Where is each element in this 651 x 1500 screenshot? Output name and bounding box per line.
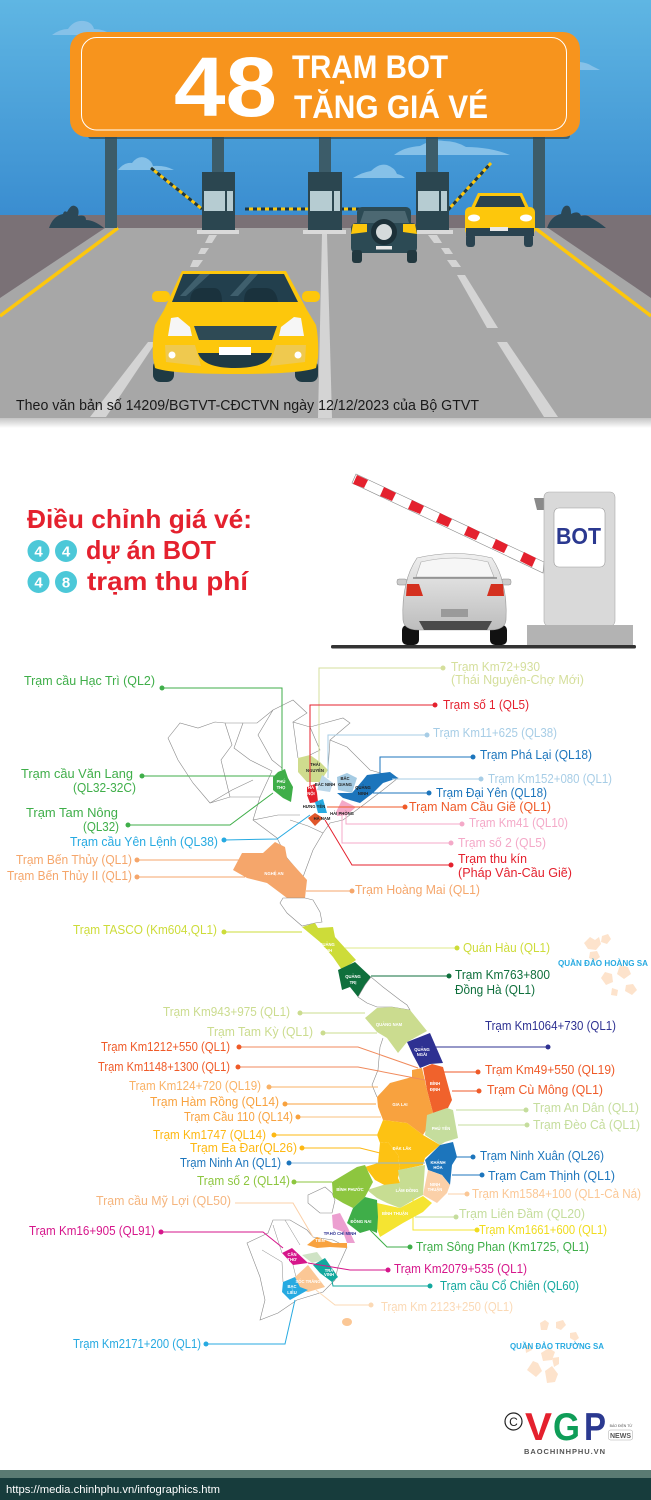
island group: Hoang Sa [558, 934, 648, 996]
province name labels: QUẢNG [319, 942, 335, 947]
yellow edge lines [0, 228, 651, 316]
province name labels: HÀ NAM [314, 816, 331, 821]
station label: Ea Dar: Trạm Ea Đar(QL26) [190, 1141, 297, 1155]
province name labels: NINH [358, 791, 368, 796]
province name labels: ĐỒNG NAI [351, 1219, 371, 1224]
province name labels: HƯNG YÊN [303, 804, 325, 809]
island group: Truong Sa: QUẦN ĐẢO TRƯỜNG SA [510, 1341, 604, 1351]
station label: Deo Ca [458, 1118, 640, 1132]
province name labels: NGUYÊN [306, 768, 324, 773]
number badges: 4 [34, 544, 43, 560]
province name labels: BÌNH PHƯỚC [336, 1187, 364, 1192]
interior borders north [210, 710, 330, 833]
station label: TASCO [73, 923, 302, 937]
island group: Hoang Sa: QUẦN ĐẢO HOÀNG SA [558, 958, 648, 968]
Quang Nam [365, 1007, 427, 1053]
logo: VGP News: G [553, 1406, 580, 1449]
station label: Ea Dar [190, 1141, 380, 1155]
island group: Truong Sa [510, 1320, 604, 1383]
station label: Song Phan: Trạm Sông Phan (Km1725, QL1) [416, 1240, 589, 1254]
number badges [28, 540, 77, 593]
Dong Nai [347, 1197, 378, 1233]
province name labels: TIỀN [315, 1238, 325, 1243]
station label: Km1212+550 [101, 1040, 418, 1068]
Khanh Hoa [425, 1142, 457, 1185]
station label: Ben Thuy II: Trạm Bến Thủy II (QL1) [7, 869, 132, 883]
station label: Km124+720 [129, 1079, 378, 1093]
station label: Ninh An [180, 1156, 425, 1170]
station label: Km11+625: Trạm Km11+625 (QL38) [433, 726, 557, 740]
station label: Cau Van Lang: Trạm cầu Văn Lang [21, 767, 133, 781]
station label: Ninh Xuan: Trạm Ninh Xuân (QL26) [480, 1149, 604, 1163]
station label: Cau Hoc Tri: Trạm cầu Hạc Trì (QL2) [24, 674, 155, 688]
province name labels: BẮC NINH [315, 782, 335, 787]
province name labels: TP.HỒ CHÍ MINH [324, 1231, 356, 1236]
Thai Nguyen [298, 755, 328, 782]
number badges: 4 [62, 544, 71, 560]
Phu Tho [273, 769, 293, 802]
station label: Quan Hau [345, 941, 550, 955]
station label: Km763+800: Trạm Km763+800 [455, 968, 550, 982]
ground line [331, 645, 636, 648]
Ho Chi Minh City [332, 1213, 355, 1243]
province name labels: BÌNH [430, 1081, 440, 1086]
booth: BOT [556, 523, 601, 549]
gantry pillars [105, 137, 545, 228]
station label: Nam Cau Gie: Trạm Nam Cầu Giẽ (QL1) [409, 800, 551, 814]
station label: Ben Thuy: Trạm Bến Thủy (QL1) [16, 853, 132, 867]
station label: An Dan [456, 1101, 639, 1115]
logo: VGP News: BAOCHINHPHU.VN [524, 1447, 605, 1456]
province name labels: LIÊU [287, 1290, 297, 1295]
province name labels: BÌNH THUẬN [382, 1211, 408, 1216]
province name labels: HẢI PHÒNG [330, 811, 354, 816]
station label: Cau 110 [184, 1110, 381, 1124]
heading: adjusted ticket prices: Điều chỉnh giá vé: [27, 504, 252, 534]
station label: Km1064+730 [436, 1019, 616, 1050]
Quang Ninh [337, 772, 398, 803]
province name labels: NGÃI [417, 1052, 427, 1057]
province name labels: QUẢNG NAM [376, 1022, 403, 1027]
station label: So 2 QL5: Trạm số 2 (QL5) [458, 836, 546, 850]
Binh Thuan [373, 1196, 432, 1237]
booth [527, 492, 633, 645]
footer bar: https://media.chinhphu.vn/infographics.htm [6, 1484, 220, 1496]
station label: Pha Lai [380, 748, 592, 775]
title sign [70, 32, 580, 137]
heading: adjusted ticket prices: dự án BOT [86, 535, 216, 565]
Mekong delta outline [247, 1220, 347, 1320]
province name labels: THỌ [277, 785, 286, 790]
station label: Km11+625 [328, 726, 557, 778]
logo: VGP News: NEWS [610, 1433, 631, 1440]
station label: Hoang Mai: Trạm Hoàng Mai (QL1) [355, 883, 480, 897]
station label: Km1148+1300: Trạm Km1148+1300 (QL1) [98, 1060, 230, 1074]
station label: Km152+080 [392, 772, 612, 786]
Vinh Long [302, 1252, 323, 1263]
Bac Giang [337, 773, 357, 793]
barrier arm [352, 474, 544, 573]
Bac Lieu [282, 1277, 308, 1300]
station label: So 1: Trạm số 1 (QL5) [443, 698, 529, 712]
station label: Ben Thuy [16, 853, 240, 867]
number badges: 4 [34, 574, 43, 592]
station label: So 2 QL14: Trạm số 2 (QL14) [197, 1174, 290, 1188]
Hue and Da Nang [358, 977, 410, 1010]
province name labels: NỘI [307, 791, 315, 796]
station label: Pha Lai: Trạm Phá Lại (QL18) [480, 748, 592, 762]
toll barriers [151, 163, 491, 210]
station label: Km 2123+250 [316, 1290, 513, 1314]
station label: Km1661+600: Trạm Km1661+600 (QL1) [479, 1223, 607, 1237]
title text: TĂNG GIÁ VÉ [294, 89, 488, 125]
lane markings [90, 234, 558, 418]
province name labels: QUẢNG [414, 1047, 430, 1052]
station label: Cau Van Lang: (QL32-32C) [73, 781, 136, 795]
station label: Nam Cau Gie [327, 800, 551, 814]
title text [292, 49, 488, 125]
Con Dao island [342, 1318, 352, 1326]
province name labels [264, 762, 450, 1295]
station label: Km41: Trạm Km41 (QL10) [469, 816, 568, 830]
province name labels: PHÚ [277, 779, 285, 784]
province name labels: GIANG [338, 782, 352, 787]
province name labels: THƠ [287, 1257, 297, 1262]
province name labels: SÓC TRĂNG [295, 1279, 321, 1284]
number badges: 8 [62, 574, 70, 592]
Binh Dinh [423, 1064, 452, 1113]
station label: Cu Mong: Trạm Cù Mông (QL1) [487, 1083, 603, 1097]
Mekong interior borders [262, 1220, 300, 1282]
station label: Cau Yen Lenh: Trạm cầu Yên Lệnh (QL38) [70, 835, 218, 849]
station label: Km16+905: Trạm Km16+905 (QL91) [29, 1224, 155, 1238]
Bac Ninh [317, 775, 333, 792]
title number: 48 [174, 40, 277, 134]
Quang Tri [338, 962, 371, 997]
station label: Cau My Loi [96, 1194, 313, 1237]
station label: Dai Yen [373, 786, 547, 800]
province name labels: BẮC [340, 776, 350, 781]
station label: Cau Co Chien: Trạm cầu Cổ Chiên (QL60) [440, 1279, 579, 1293]
Binh Phuoc [332, 1165, 373, 1208]
logo: VGP News [505, 1406, 632, 1456]
station label: Tam Nong: (QL32) [83, 820, 119, 834]
Soc Trang [295, 1265, 325, 1292]
yellow pickup [465, 193, 535, 247]
western highland border [372, 1038, 383, 1097]
silver car rear [397, 554, 511, 645]
province name labels: PHÚ YÊN [432, 1126, 450, 1131]
station label: Thu kin: Trạm thu kín [458, 852, 527, 866]
northern provinces outline [168, 700, 398, 877]
province name labels: ĐẮK LẮK [393, 1146, 411, 1151]
station label: Km2079+535: Trạm Km2079+535 (QL1) [394, 1262, 527, 1276]
station label: Tam Ky [207, 1025, 377, 1039]
Can Tho [282, 1248, 308, 1265]
station label: Cau 110: Trạm Cầu 110 (QL14) [184, 1110, 293, 1124]
station label: Km1661+600 [413, 1198, 607, 1237]
station label: Lien Dam: Trạm Liên Đầm (QL20) [459, 1207, 585, 1221]
source note: Theo văn bản số 14209/BGTVT-CĐCTVN ngày 12/12/2023 của Bộ GTVT [16, 397, 479, 414]
illustration: car at BOT barrier [331, 474, 636, 648]
station label: Thu kin: (Pháp Vân-Cầu Giẽ) [458, 866, 572, 880]
province name labels: LÂM ĐỒNG [396, 1188, 418, 1193]
clouds [52, 21, 600, 178]
footer bar [0, 1470, 651, 1500]
station label: Ham Rong: Trạm Hàm Rồng (QL14) [150, 1095, 279, 1109]
heading: adjusted ticket prices: trạm thu phí [87, 566, 249, 596]
station label: Km72+930: Trạm Km72+930 [451, 660, 540, 674]
province name labels: QUẢNG [345, 974, 361, 979]
province name labels: KHÁNH [430, 1160, 446, 1165]
Dak Nong [365, 1142, 400, 1187]
map of Vietnam [168, 700, 458, 1326]
province name labels: CẦN [287, 1252, 297, 1257]
station label: Km72+930 [319, 660, 584, 762]
Phu Yen [425, 1108, 458, 1145]
hero: toll plaza illustration [0, 0, 651, 428]
roadside ground [0, 215, 651, 305]
station label: Tam Ky: Trạm Tam Kỳ (QL1) [207, 1025, 313, 1039]
station label: Cau Van Lang [21, 767, 275, 795]
station label: Km49+550: Trạm Km49+550 (QL19) [485, 1063, 615, 1077]
station label: Km1747 [153, 1128, 377, 1142]
station label: Km1212+550: Trạm Km1212+550 (QL1) [101, 1040, 230, 1054]
logo: VGP News: P [584, 1406, 606, 1449]
station label: Cau Co Chien [332, 1279, 579, 1293]
province name labels: QUẢNG [355, 785, 371, 790]
Nghe An [233, 842, 307, 898]
sign shadow [88, 131, 570, 139]
station label: Km2171+200 [73, 1300, 295, 1351]
province name labels: HÀ [308, 785, 314, 790]
province name labels: NINH [430, 1182, 440, 1187]
station label: Km943+975 [163, 1005, 365, 1019]
station label: Cau Hoc Tri [24, 674, 282, 770]
Tay Ninh and Binh Duong [308, 1187, 335, 1213]
Ninh Thuan [423, 1170, 450, 1203]
station label: Thu kin [325, 820, 572, 880]
yellow car foreground [152, 271, 320, 382]
Quang Ngai [407, 1033, 443, 1068]
station label: Ninh An: Trạm Ninh An (QL1) [180, 1156, 281, 1170]
Ha Tinh and north central coast [280, 898, 322, 926]
province name labels: BÌNH [322, 948, 332, 953]
station label: Km124+720: Trạm Km124+720 (QL19) [129, 1079, 261, 1093]
road surface [0, 228, 651, 418]
station label: Cam Thinh: Trạm Cam Thịnh (QL1) [488, 1169, 615, 1183]
province name labels: TRỊ [350, 980, 356, 985]
logo: VGP News: C [509, 1415, 518, 1429]
heading: adjusted ticket prices [27, 504, 252, 596]
province name labels: THÁI [310, 762, 320, 767]
province name labels: VINH [324, 1272, 334, 1277]
station label: Tam Nong [26, 793, 273, 834]
province name labels: GIA LAI [392, 1102, 408, 1107]
station label: So 2 QL5 [342, 815, 546, 850]
station label: Ham Rong [150, 1095, 376, 1109]
station label: Cau Yen Lenh [70, 815, 310, 849]
station label: Km1584+100: Trạm Km1584+100 (QL1-Cà Ná) [472, 1187, 641, 1201]
station label: Deo Ca: Trạm Đèo Cả (QL1) [533, 1118, 640, 1132]
toll booths [197, 172, 453, 234]
station label: Km1148+1300 [98, 1060, 425, 1080]
station label: Quan Hau: Quán Hàu (QL1) [463, 941, 550, 955]
station label: Km16+905 [29, 1224, 283, 1248]
station label: An Dan: Trạm An Dân (QL1) [533, 1101, 639, 1115]
Tien Giang [307, 1237, 347, 1248]
Gia Lai [377, 1068, 433, 1135]
province name labels: NGHỆ AN [264, 871, 284, 876]
Hung Yen [315, 799, 327, 813]
hero bottom shade [0, 418, 651, 428]
Quang Binh [302, 923, 356, 970]
station label: Dai Yen: Trạm Đại Yên (QL18) [436, 786, 547, 800]
station label: Km763+800: Đồng Hà (QL1) [455, 983, 535, 997]
bushes [49, 206, 606, 228]
province name labels: ĐỊNH [430, 1087, 440, 1092]
station label: Song Phan [370, 1230, 589, 1254]
province name labels: BẠC [287, 1284, 297, 1289]
station label: Km1747: Trạm Km1747 (QL14) [153, 1128, 266, 1142]
station label: Km72+930: (Thái Nguyên-Chợ Mới) [451, 673, 584, 687]
province name labels: THUẬN [428, 1187, 442, 1192]
Lam Dong [367, 1165, 425, 1208]
province name labels: TRÀ [325, 1268, 333, 1273]
station label: Tam Nong: Trạm Tam Nông [26, 806, 118, 820]
station label: Km152+080: Trạm Km152+080 (QL1) [488, 772, 612, 786]
station label: Ben Thuy II [7, 869, 245, 883]
station label: Km1064+730: Trạm Km1064+730 (QL1) [485, 1019, 616, 1033]
Tra Vinh [313, 1258, 338, 1282]
logo: VGP News: V [525, 1406, 552, 1449]
station label: Km 2123+250: Trạm Km 2123+250 (QL1) [381, 1300, 513, 1314]
logo: VGP News: BÁO ĐIỆN TỬ [610, 1423, 632, 1428]
Ha Noi [307, 784, 318, 803]
station label: Km2079+535 [308, 1262, 527, 1276]
station label: TASCO: Trạm TASCO (Km604,QL1) [73, 923, 217, 937]
station label: Km763+800 [371, 968, 550, 997]
dark jeep [351, 207, 417, 263]
Ha Nam [308, 813, 323, 826]
station label: So 1 [310, 698, 529, 786]
title text: TRẠM BOT [292, 49, 448, 85]
station label: Km943+975: Trạm Km943+975 (QL1) [163, 1005, 290, 1019]
Dak Lak [377, 1120, 440, 1170]
Hai Phong [336, 800, 356, 816]
province name labels: HÒA [433, 1165, 443, 1170]
station label: Km41 [346, 815, 568, 830]
station label: Cau My Loi: Trạm cầu Mỹ Lợi (QL50) [96, 1194, 231, 1208]
station label: Km2171+200: Trạm Km2171+200 (QL1) [73, 1337, 201, 1351]
